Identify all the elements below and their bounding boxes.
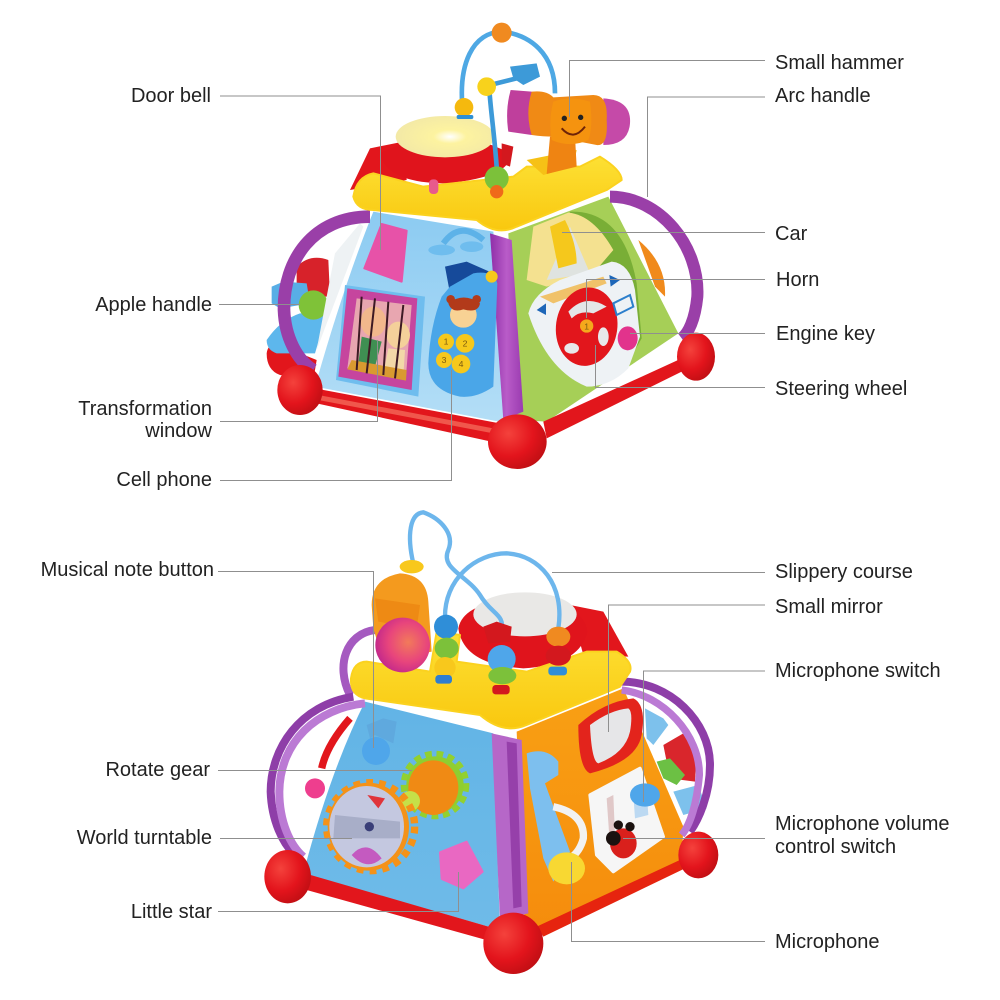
labels: bottom: Musical note button	[41, 559, 214, 581]
rear red roof	[570, 605, 628, 657]
labels: top: window	[144, 420, 213, 442]
red base	[305, 858, 685, 943]
left blue face	[303, 702, 500, 930]
small mirror	[578, 698, 643, 773]
labels: top: Engine key	[776, 323, 875, 345]
world turntable	[327, 783, 415, 871]
right green face	[508, 197, 678, 422]
labels: bottom: control switch	[775, 836, 896, 858]
left rear details	[322, 718, 350, 768]
pink peg	[429, 179, 438, 194]
labels: top: Door bell	[131, 85, 211, 107]
cell phone: 4	[459, 359, 464, 369]
toy: top view	[267, 23, 715, 469]
apple handle toys	[267, 223, 363, 380]
labels: bottom: Little star	[131, 901, 212, 923]
ladybug	[610, 828, 637, 858]
rotate gear	[400, 754, 466, 816]
cell phone: 2	[463, 338, 468, 348]
labels: top: Steering wheel	[775, 378, 907, 400]
right arc handle	[610, 197, 697, 338]
labels: bottom	[41, 559, 950, 953]
drum	[458, 592, 587, 668]
small hammer head	[372, 573, 432, 672]
microphone	[527, 751, 585, 884]
front purple post	[490, 233, 523, 420]
leader lines: top	[219, 60, 765, 480]
engine key	[618, 326, 638, 350]
yellow top panel	[353, 157, 622, 230]
labels: top: Horn	[776, 269, 819, 291]
cell phone	[428, 262, 498, 397]
labels: top: Apple handle	[95, 294, 212, 316]
cell phone: 3	[442, 355, 447, 365]
bead maze	[400, 512, 571, 694]
yellow top panel	[351, 632, 631, 728]
balls	[264, 850, 311, 903]
right orange face	[517, 688, 683, 935]
labels: bottom: Slippery course	[775, 561, 913, 583]
balls	[277, 365, 323, 415]
transformation window	[336, 285, 425, 397]
toy: bottom view	[264, 512, 718, 974]
little star	[440, 842, 483, 888]
steering wheel panel	[528, 262, 640, 387]
car panel	[527, 213, 613, 287]
left blue face	[315, 212, 508, 423]
bead maze	[455, 23, 555, 198]
labels: bottom: Microphone	[775, 931, 880, 953]
left arc handle	[284, 217, 370, 370]
leader lines: bottom	[218, 572, 765, 942]
rainbow decor	[428, 231, 483, 255]
musical note button	[362, 718, 397, 765]
rear red roof	[350, 142, 407, 190]
green recess	[570, 212, 642, 380]
red base	[315, 358, 685, 445]
labels: bottom: Rotate gear	[105, 759, 210, 781]
labels: bottom: Microphone volume	[775, 813, 950, 835]
labels: top: Small hammer	[775, 52, 904, 74]
back small arc	[343, 630, 375, 695]
steering wheel panel: 1	[584, 321, 589, 331]
drum	[380, 116, 510, 183]
microphone switch	[630, 783, 660, 807]
microphone volume panel	[590, 768, 663, 872]
labels: top	[78, 52, 907, 491]
left arc handle	[279, 703, 365, 857]
labels: top: Transformation	[78, 398, 212, 420]
small hammer	[507, 90, 630, 175]
labels: bottom: Microphone switch	[775, 660, 941, 682]
right arc handle	[622, 690, 699, 835]
cell phone: 1	[444, 337, 449, 347]
labels: top: Arc handle	[775, 85, 871, 107]
door bell	[364, 224, 407, 282]
labels: top: Cell phone	[116, 469, 212, 491]
orange toy behind	[638, 240, 665, 297]
right toys	[645, 708, 707, 815]
right outer arc	[622, 682, 710, 832]
labels: top: Car	[775, 223, 808, 245]
labels: bottom: World turntable	[77, 827, 212, 849]
front purple post	[492, 733, 528, 920]
labels: bottom: Small mirror	[775, 596, 883, 618]
outer left arc	[271, 697, 353, 853]
